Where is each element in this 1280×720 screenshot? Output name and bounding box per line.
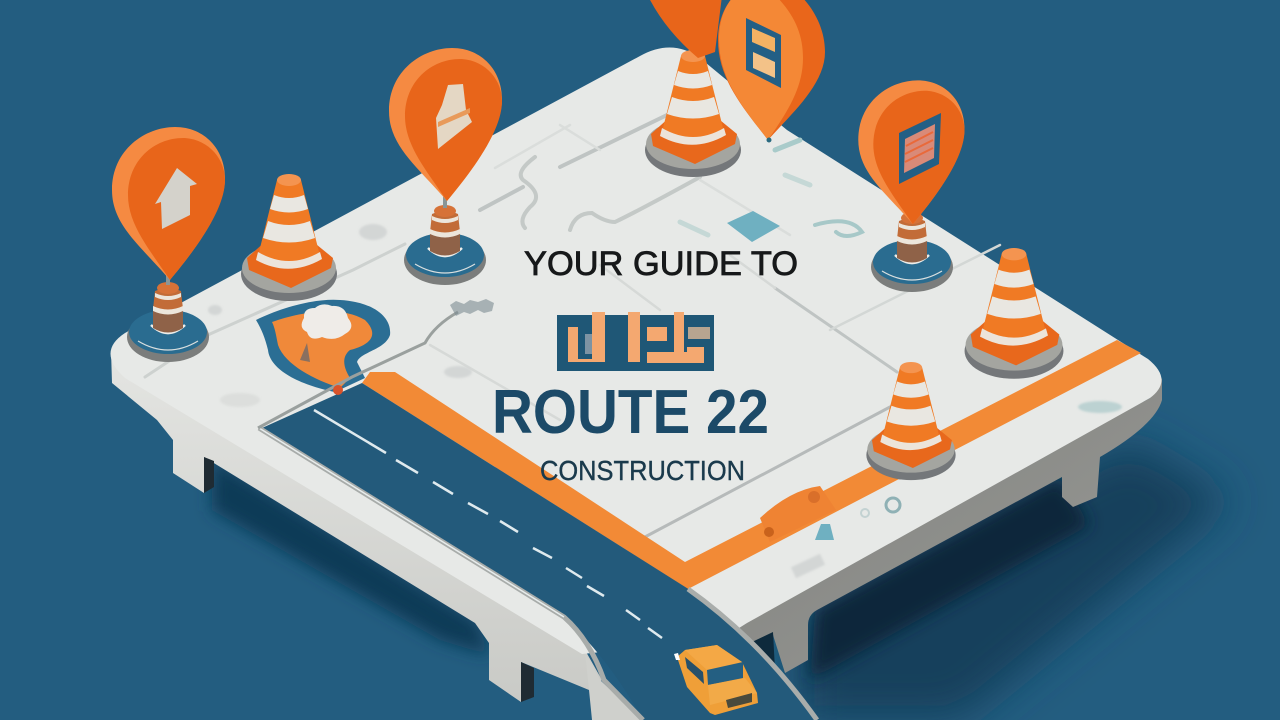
subtitle: construction: CONSTRUCTION [540, 455, 745, 486]
road lane dashes [314, 410, 386, 453]
pin stand: right [871, 199, 953, 292]
map streets [145, 115, 1000, 538]
sign: blue route badge [557, 312, 714, 371]
road guard rails [688, 589, 817, 720]
leg notch right [752, 632, 775, 672]
cone: back left [241, 174, 337, 301]
platform [110, 47, 1162, 720]
leg notch bottom [521, 662, 534, 702]
orange route strip [362, 340, 1141, 589]
icon: teal map marker [727, 211, 780, 242]
icon: document panel [746, 18, 781, 88]
pin: list [718, 0, 825, 142]
leg notch left [204, 457, 214, 493]
title: route 22: ROUTE 22 [492, 378, 769, 447]
cone: right [965, 248, 1063, 379]
icon: orange spill with rock [256, 299, 494, 428]
cone: top center [645, 50, 741, 177]
icon: box [436, 84, 472, 149]
icon: up arrow house [155, 168, 197, 229]
pin: back (partly off canvas) [648, 0, 722, 58]
cone: front right [866, 362, 956, 480]
pin stand: left [127, 269, 209, 362]
platform side right [735, 378, 1162, 673]
title: your guide to: YOUR GUIDE TO [524, 245, 798, 283]
icon: teal marks [815, 498, 900, 540]
icon: report sheet [899, 113, 941, 184]
road crack line [258, 312, 458, 428]
platform top [110, 47, 1162, 654]
car [674, 645, 758, 715]
pin: box [389, 48, 502, 201]
pin: report [858, 80, 964, 224]
road [259, 383, 817, 720]
platform shadow [212, 440, 1230, 720]
map faint blocks [208, 224, 1122, 578]
platform side left [111, 350, 602, 702]
pin: arrow house [112, 127, 225, 280]
pin stand: center left [404, 192, 486, 285]
bottom pillar [585, 652, 643, 720]
